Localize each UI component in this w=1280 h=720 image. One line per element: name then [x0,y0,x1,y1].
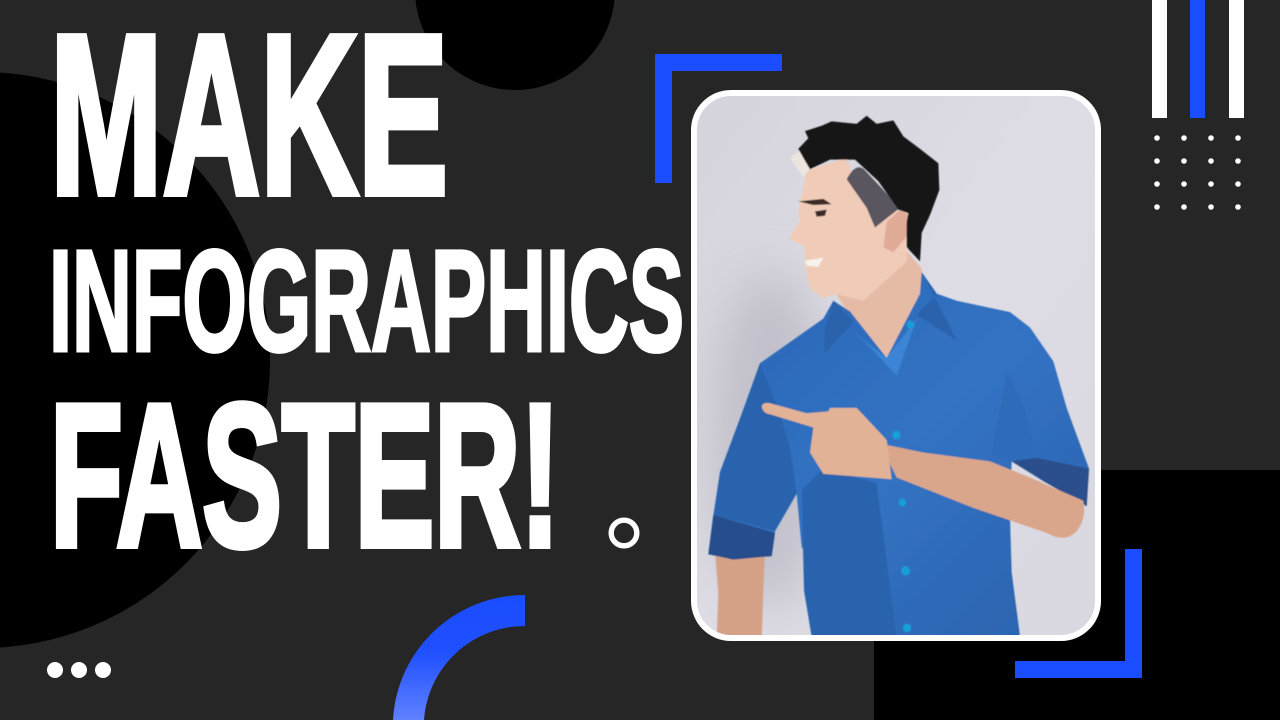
blue corner bracket bottom right of photo [1015,549,1142,678]
black rectangle bottom right [874,470,1280,720]
lower left arm [715,551,765,640]
shirt lower shading [802,469,897,636]
face [789,158,910,301]
pointing hand [762,403,892,479]
black circle top [415,0,615,90]
neck [823,247,923,358]
ear [883,210,908,252]
blue corner bracket top left of photo [655,54,782,183]
light wisp on hair [790,150,810,177]
dot grid top right [1154,135,1241,210]
smile [805,258,823,267]
wall shadow [710,270,830,610]
black circle left [0,72,270,648]
hair [798,116,939,261]
shirt [708,272,1089,636]
title line: faster: FASTER! [50,362,560,590]
ring accent [611,520,637,546]
photo: man pointing left [708,116,1089,640]
photo card [691,90,1101,641]
photo wall background [697,96,1095,635]
buttons [892,321,914,632]
right sleeve seam [992,372,1037,461]
title [49,0,684,590]
left sleeve shading [714,363,797,531]
three white dots [47,662,111,678]
forearm [880,444,1084,538]
inner placket [858,320,916,375]
title line: infographics: INFOGRAPHICS [49,220,684,382]
hair fade [847,167,900,227]
right cuff [1012,458,1089,506]
blue quarter arc [393,595,525,720]
vertical bars top right [1152,0,1244,118]
eye and brow [798,199,832,217]
person [708,116,1089,640]
left cuff [708,515,775,560]
collar [824,272,957,354]
card frame [691,90,1101,641]
